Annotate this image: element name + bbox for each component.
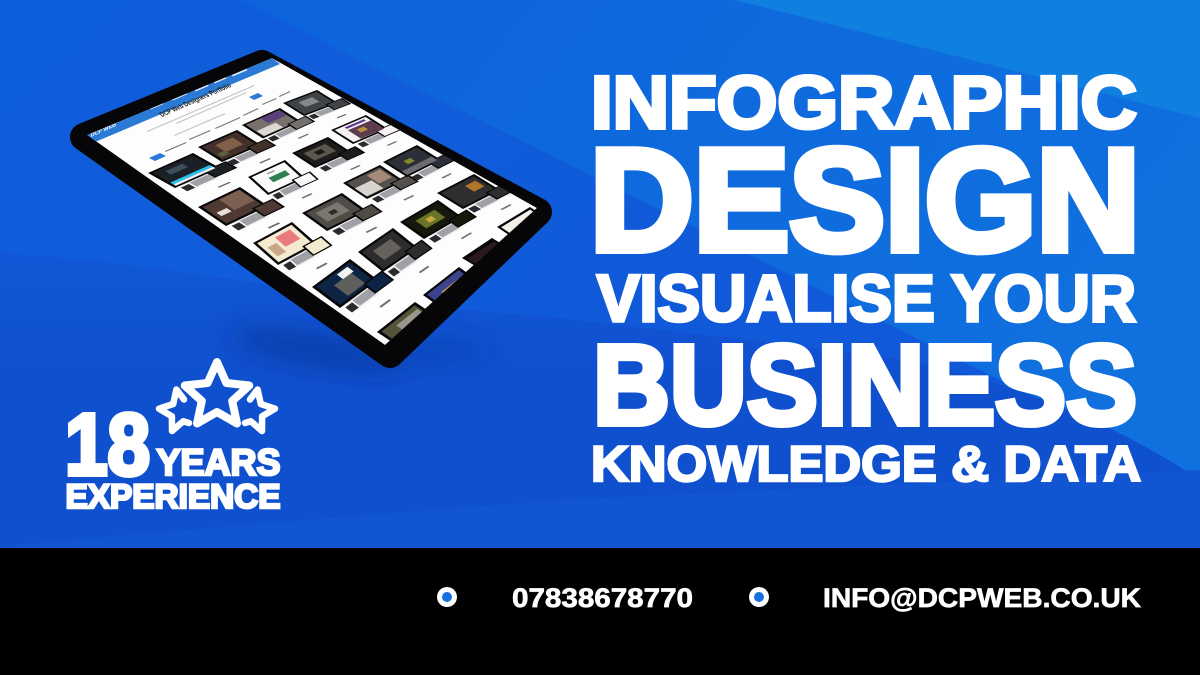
tablet shadow (227, 323, 490, 377)
tablet device (84, 58, 589, 366)
tablet screen (87, 58, 537, 345)
header bar (87, 58, 280, 142)
experience: EXPERIENCE (66, 478, 280, 516)
contact bar (0, 548, 1200, 675)
phone number: 07838678770 (512, 583, 693, 613)
years: YEARS (156, 442, 280, 483)
intro lines (147, 85, 255, 136)
filter tabs (165, 91, 290, 152)
icon: email bullet (749, 587, 769, 607)
headline line: visualise your: VISUALISE YOUR (597, 261, 1136, 335)
logo: DCP WEB (90, 122, 117, 139)
nav links (150, 69, 247, 109)
tablet body (84, 64, 538, 354)
headline line: design: DESIGN (590, 119, 1140, 281)
headline (590, 61, 1141, 492)
icon: phone bullet (437, 587, 457, 607)
email address: INFO@DCPWEB.CO.UK (823, 583, 1142, 613)
headline line: business: BUSINESS (593, 322, 1137, 448)
badge: 18 years experience (65, 362, 280, 516)
icon: three stars (159, 362, 275, 431)
filter buttons (149, 153, 166, 161)
portfolio thumbnails (148, 90, 534, 340)
headline line: infographic: INFOGRAPHIC (591, 61, 1137, 144)
number 18: 18 (65, 396, 150, 494)
headline line: knowledge and data: KNOWLEDGE & DATA (591, 435, 1141, 492)
page heading: DCP Web Designers Portfolio (157, 81, 233, 118)
